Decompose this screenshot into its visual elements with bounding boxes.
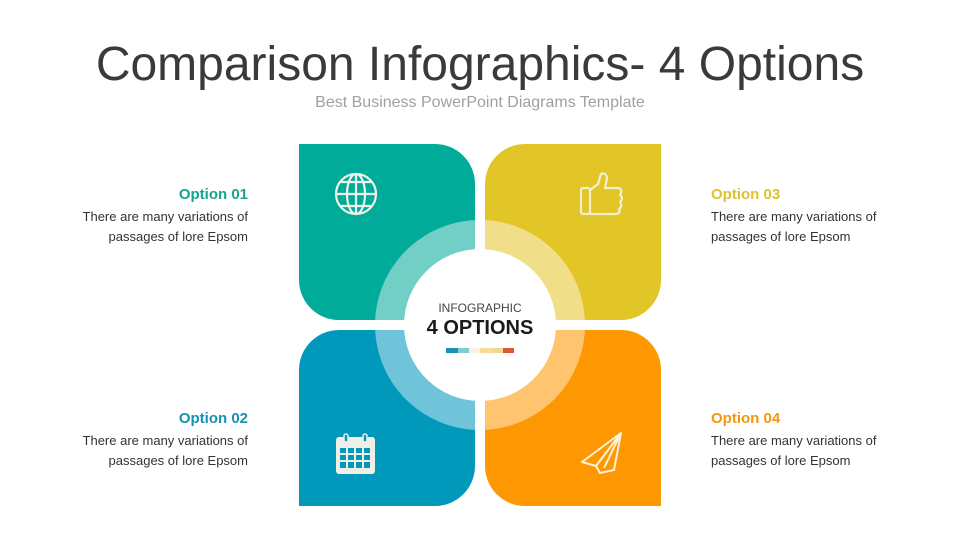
center text: [427, 301, 533, 353]
icon: paper plane: [582, 433, 621, 473]
center text: 4 OPTIONS: [427, 317, 533, 339]
option 03 text: passages of lore Epsom: [711, 229, 850, 244]
option 04 text: passages of lore Epsom: [711, 453, 850, 468]
option 04 text: There are many variations of: [711, 433, 877, 448]
option 01 text: Option 01: [179, 186, 248, 203]
option 02 text: There are many variations of: [83, 433, 248, 448]
option 02 text: [83, 410, 248, 468]
ring: [365, 210, 595, 440]
option 02 text: Option 02: [179, 410, 248, 427]
icon: calendar: [336, 434, 375, 474]
option 04 text: Option 04: [711, 410, 781, 427]
icon: globe: [336, 174, 376, 214]
subtitle: Best Business PowerPoint Diagrams Template: [315, 94, 645, 111]
option 01 text: passages of lore Epsom: [109, 229, 248, 244]
option 03 text: There are many variations of: [711, 209, 877, 224]
option 01 text: There are many variations of: [83, 209, 248, 224]
color bar: [446, 348, 514, 353]
option 02 text: passages of lore Epsom: [109, 453, 248, 468]
panel: yellow: [485, 144, 661, 320]
option 03 text: [711, 186, 877, 244]
title: Comparison Infographics- 4 Options: [96, 38, 864, 91]
panel: orange: [485, 330, 661, 506]
center text: INFOGRAPHIC: [438, 301, 522, 315]
option 01 text: [83, 186, 248, 244]
diagram: [299, 144, 661, 506]
panel: teal: [299, 144, 475, 320]
panel: blue: [299, 330, 475, 506]
option 03 text: Option 03: [711, 186, 780, 203]
option 04 text: [711, 410, 877, 468]
icon: thumbs up: [581, 174, 622, 214]
